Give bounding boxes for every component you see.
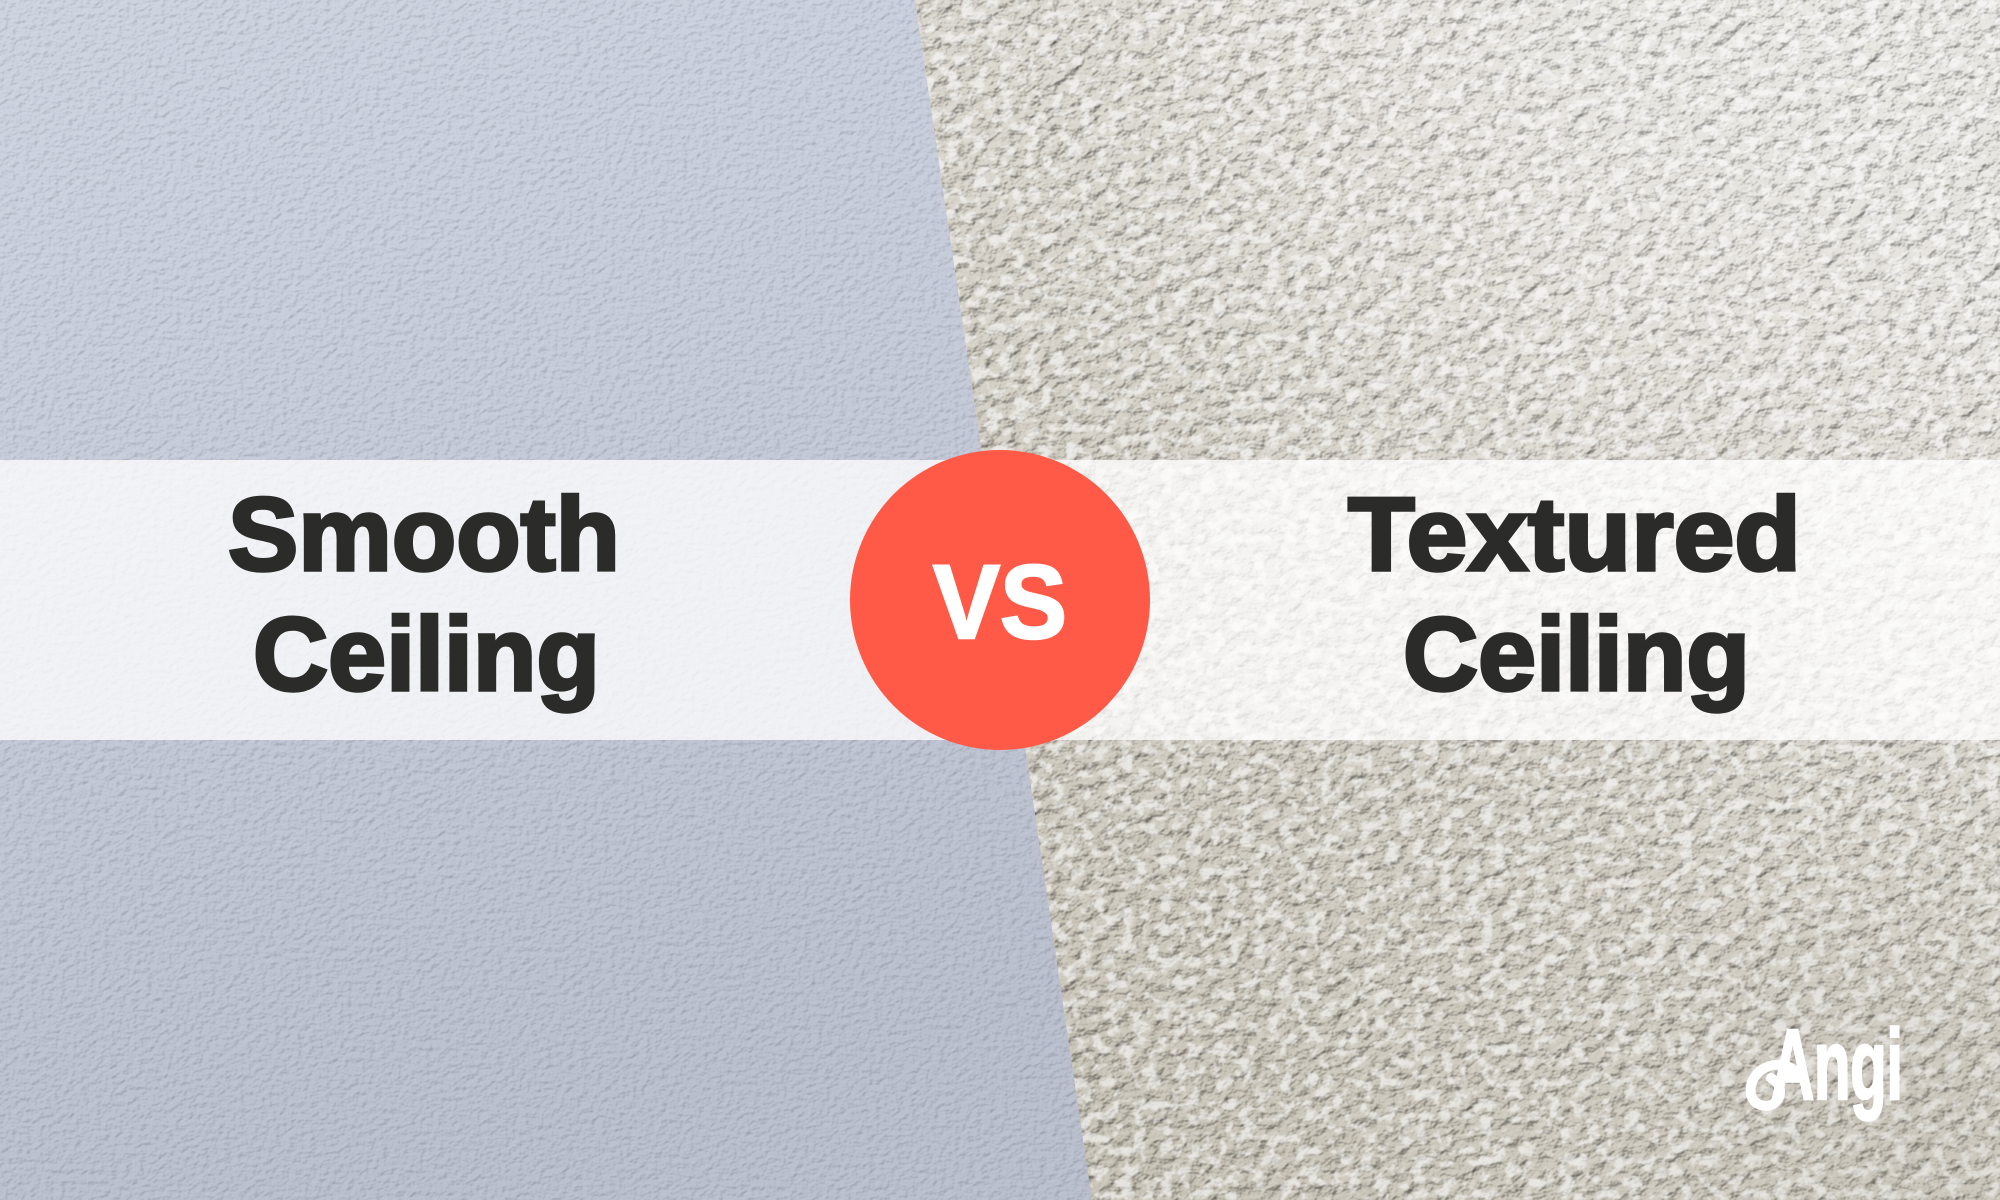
- heading: smooth ceiling: Ceiling: [253, 597, 600, 713]
- heading: textured ceiling: [1348, 477, 1801, 713]
- panel: textured ceiling background: [900, 0, 2000, 1200]
- heading: smooth ceiling: Smooth: [228, 477, 620, 593]
- heading: smooth ceiling: [228, 477, 620, 713]
- panel: smooth ceiling background: [0, 0, 1100, 1200]
- heading: textured ceiling: Ceiling: [1403, 597, 1750, 713]
- logo: Angi: Angi: [1771, 1009, 1903, 1121]
- vs badge: VS: [933, 544, 1067, 661]
- vs badge: [850, 450, 1150, 750]
- heading: textured ceiling: Textured: [1348, 477, 1801, 593]
- translucent title band: [0, 460, 2000, 740]
